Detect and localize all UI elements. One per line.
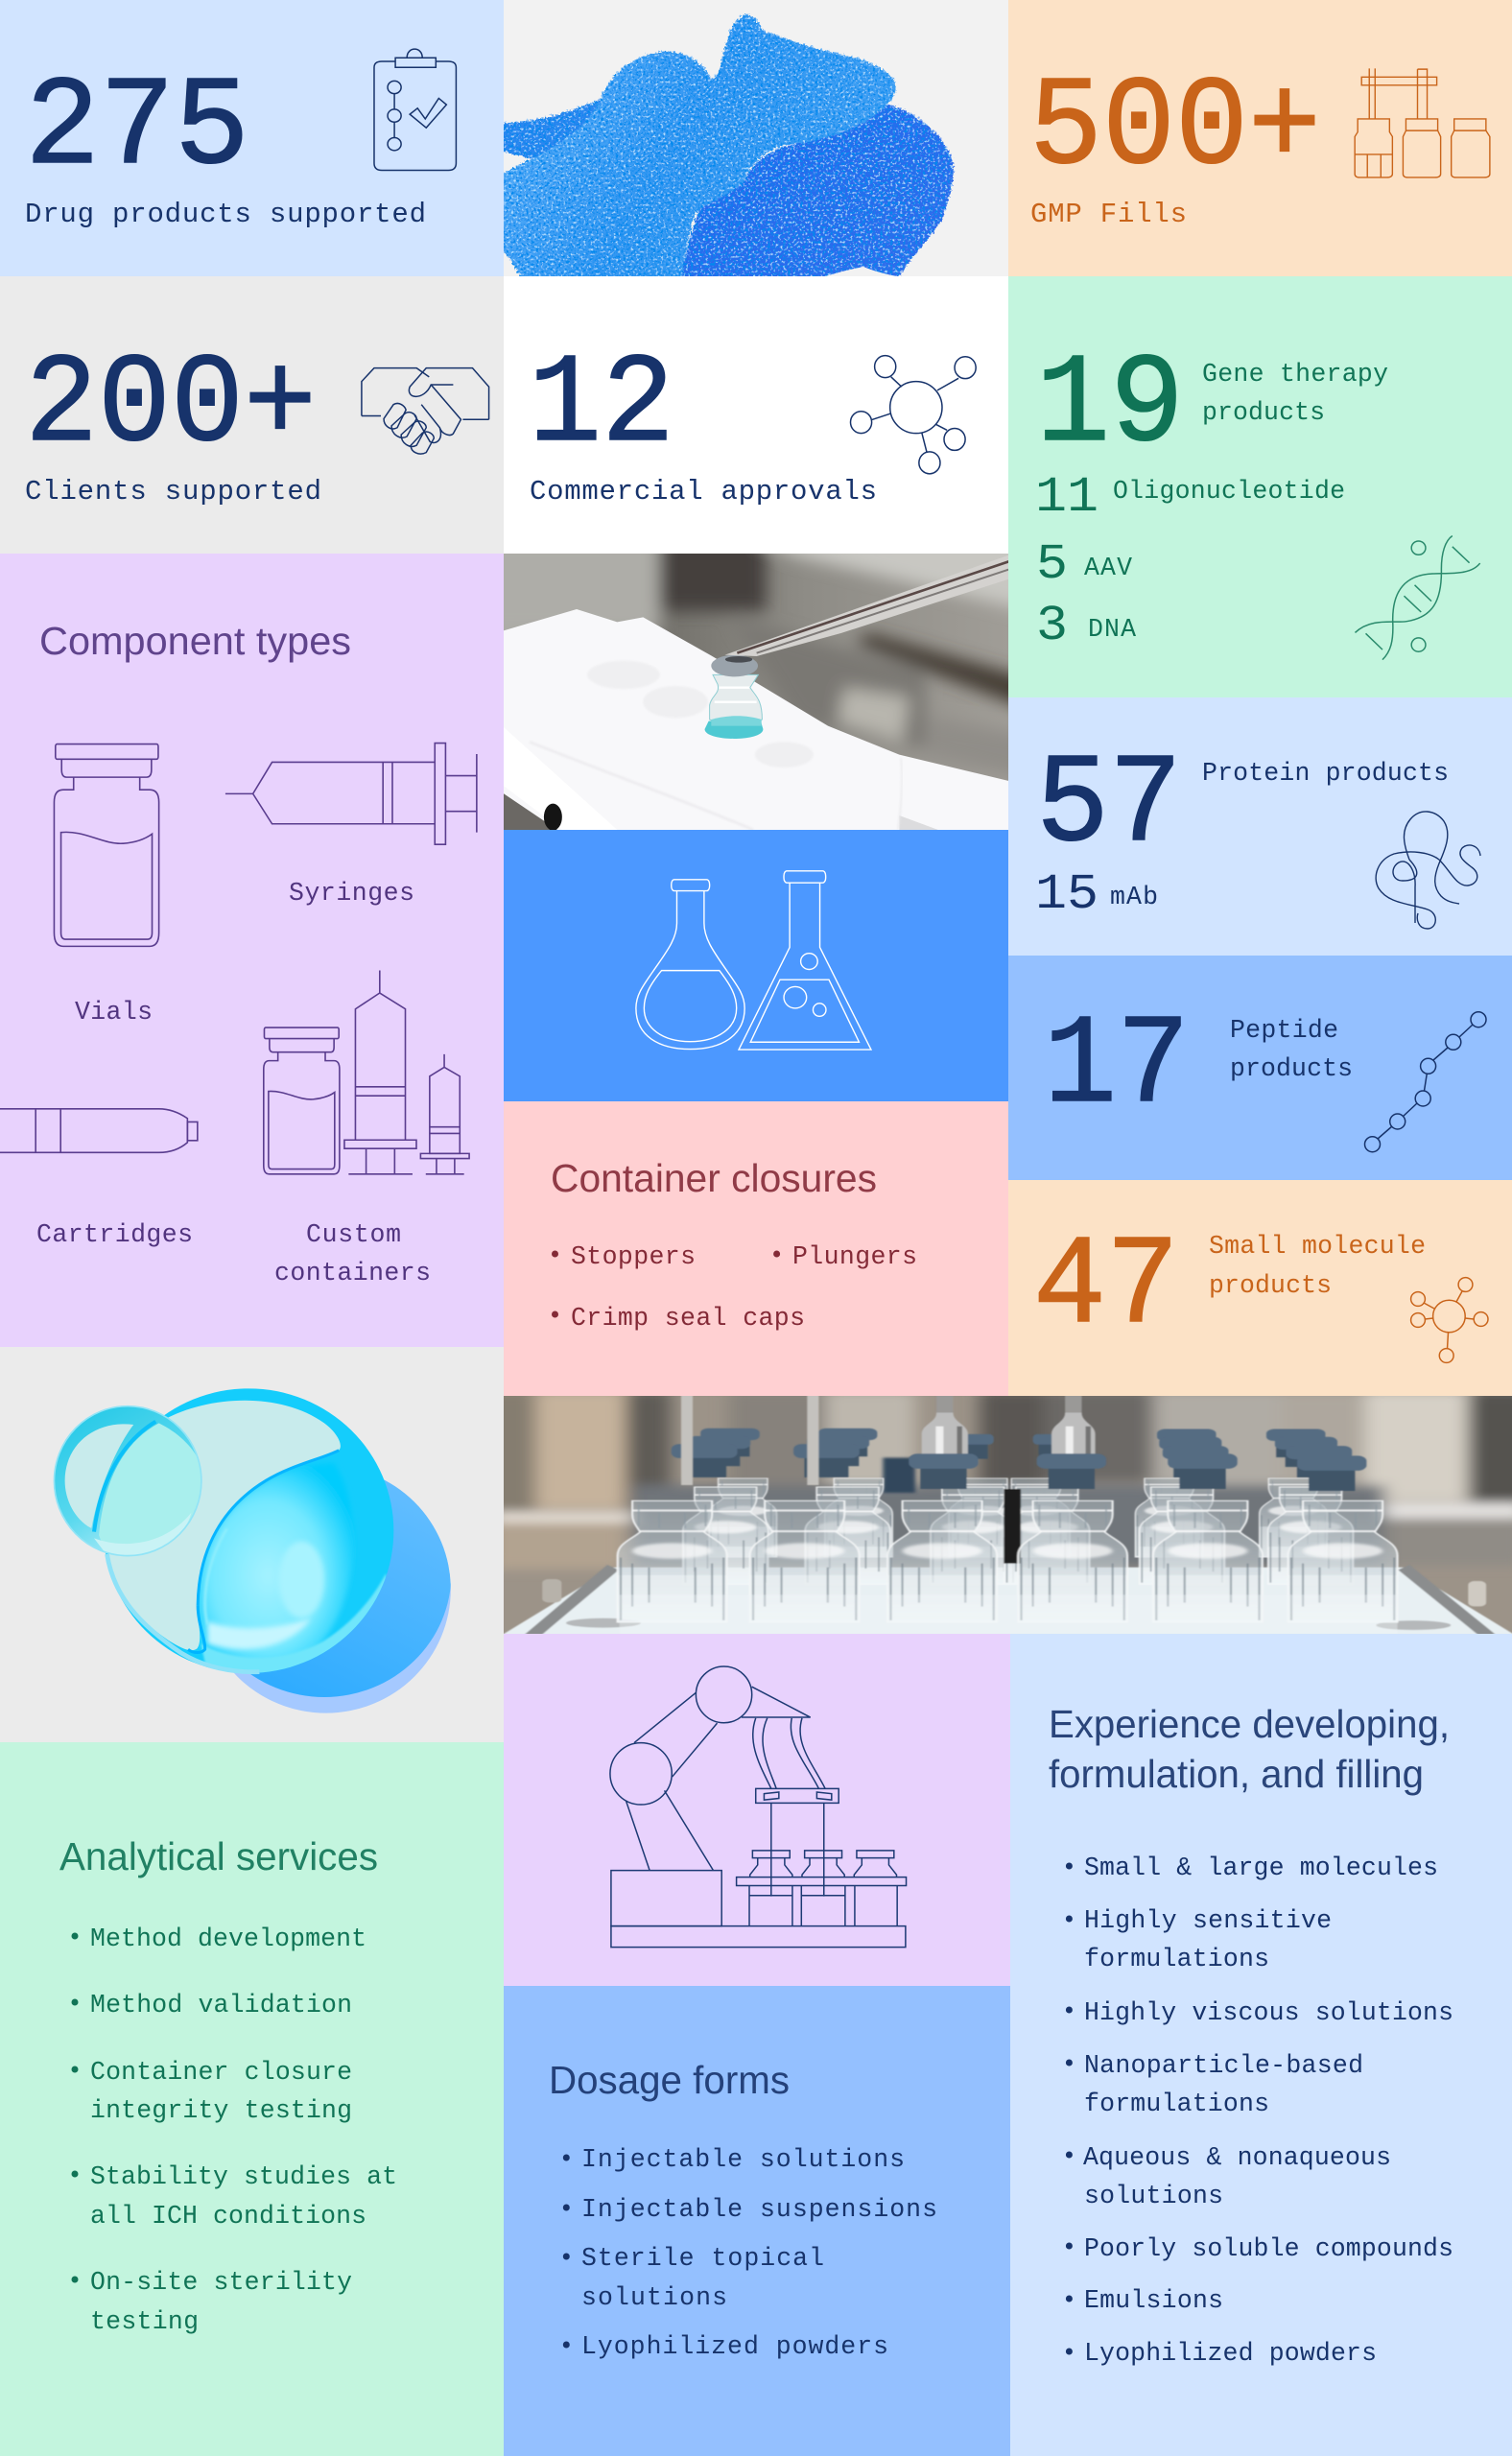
- stat number: 275: 275: [25, 57, 249, 201]
- list: analytical services: Stability studies at: [90, 2162, 397, 2191]
- list: closure types: Crimp seal caps: [571, 1304, 805, 1333]
- sub-stat: 11 oligonucleotide: [1035, 469, 1345, 526]
- list: experience: Highly viscous solutions: [1084, 1998, 1453, 2027]
- label: peptide products: Peptide: [1230, 1016, 1338, 1045]
- sub-stat: 5 AAV: [1036, 536, 1132, 593]
- panel: bubbles image: [0, 1347, 504, 1742]
- label: gene therapy products: Gene therapy: [1202, 360, 1388, 389]
- sub-stat: 15 mAb: [1035, 866, 1158, 923]
- heading: experience developing, formulation, and filling: Experience developing,: [1049, 1702, 1450, 1746]
- panel: component types: [0, 554, 504, 1347]
- sub-stat: 3 DNA: [1036, 598, 1136, 654]
- label: protein products: Protein products: [1202, 759, 1449, 788]
- panel: 12 commercial approvals: [504, 276, 1008, 554]
- stat number: 57: 57: [1036, 734, 1182, 878]
- label: small molecule products: products: [1209, 1271, 1332, 1300]
- label: small molecule products: Small molecule: [1209, 1232, 1426, 1261]
- panel: 275 drug products supported: [0, 0, 504, 276]
- list: analytical services: [71, 1925, 397, 2336]
- stat label: clients supported: Clients supported: [25, 476, 321, 508]
- sub-stat: 3 DNA: 3: [1036, 598, 1068, 654]
- sub-stat: 15 mAb: mAb: [1110, 883, 1158, 911]
- image: glass bubbles: [54, 1388, 451, 1713]
- liquid: [704, 721, 764, 739]
- icon: vial: [54, 744, 159, 946]
- panel: flasks illustration: [504, 830, 1008, 1101]
- icon: molecule network: [850, 356, 976, 474]
- label: small molecule products: [1209, 1232, 1426, 1300]
- stat label: GMP fills: GMP Fills: [1030, 199, 1187, 230]
- image: glass vials on filling line: [478, 1391, 1512, 1638]
- icon: cartridge: [0, 1109, 198, 1152]
- sub-stat: 5 AAV: 5: [1036, 536, 1068, 593]
- image: vial held by tweezers on white tray: [504, 554, 1008, 830]
- panel: container closures: [504, 1101, 1008, 1396]
- icon: handshake: [362, 368, 489, 454]
- list: experience: Emulsions: [1084, 2286, 1223, 2315]
- list: dosage forms: Lyophilized powders: [581, 2332, 888, 2361]
- list: experience: solutions: [1084, 2182, 1223, 2210]
- list: analytical services: Method validation: [90, 1991, 352, 2019]
- icon: protein scribble: [1376, 812, 1480, 929]
- list: experience: Aqueous & nonaqueous: [1083, 2143, 1391, 2172]
- sub-stat: 11 oligonucleotide: 11: [1035, 469, 1099, 526]
- heading: container closures: Container closures: [551, 1156, 877, 1200]
- label: gene therapy products: [1202, 360, 1388, 427]
- heading: experience developing, formulation, and filling: formulation, and filling: [1049, 1752, 1424, 1796]
- sub-stat: 3 DNA: DNA: [1088, 615, 1136, 644]
- image: blue particle blob: [497, 0, 1008, 285]
- stat number: 17: 17: [1044, 995, 1190, 1139]
- stat number: 200+: 200+: [25, 334, 317, 478]
- heading: dosage forms: Dosage forms: [549, 2058, 790, 2102]
- stat number: 500+: 500+: [1029, 57, 1321, 201]
- list: experience: Small & large molecules: [1084, 1854, 1438, 1882]
- panel: 200+ clients supported: [0, 276, 504, 554]
- list: analytical services: Container closure: [90, 2058, 352, 2087]
- list: experience: Highly sensitive: [1084, 1906, 1332, 1935]
- list: experience: Lyophilized powders: [1084, 2339, 1377, 2368]
- list: closure types: [552, 1242, 917, 1333]
- stat number: 19: 19: [1036, 334, 1184, 478]
- label: peptide products: products: [1230, 1054, 1353, 1083]
- sub-stat: 15 mAb: 15: [1035, 866, 1099, 923]
- heading: experience developing, formulation, and filling: [1049, 1702, 1450, 1796]
- icon: round flask and erlenmeyer flask: [636, 871, 871, 1050]
- heading: component types: Component types: [39, 619, 351, 663]
- stat label: drug products supported: Drug products supported: [25, 199, 426, 230]
- label: custom containers: Custom: [306, 1220, 401, 1249]
- stat number: 47: 47: [1033, 1216, 1179, 1359]
- list: analytical services: all ICH conditions: [90, 2202, 366, 2231]
- stat label: commercial approvals: Commercial approvals: [530, 476, 877, 508]
- panel: small molecule products: [1008, 1180, 1512, 1396]
- icon: clipboard checklist: [374, 49, 456, 171]
- icon: syringe: [225, 744, 477, 844]
- label: custom containers: [274, 1220, 431, 1287]
- list: analytical services: On-site sterility: [90, 2268, 352, 2297]
- icon: peptide chain: [1364, 1012, 1486, 1152]
- list: closure types: Plungers: [792, 1242, 917, 1271]
- panel: analytical services: [0, 1742, 504, 2456]
- list: analytical services: testing: [90, 2307, 199, 2336]
- label: gene therapy products: products: [1202, 398, 1325, 427]
- list: analytical services: integrity testing: [90, 2096, 352, 2125]
- list: dosage forms: Injectable solutions: [581, 2145, 905, 2174]
- list: dosage forms: Sterile topical: [581, 2244, 824, 2273]
- list: closure types: Stoppers: [571, 1242, 696, 1271]
- icon: filling station with vials: [1355, 68, 1490, 177]
- list: experience: Poorly soluble compounds: [1084, 2234, 1453, 2263]
- panel: 500+ GMP fills: [1008, 0, 1512, 276]
- label: custom containers: containers: [274, 1259, 431, 1287]
- label: vials: Vials: [75, 998, 153, 1027]
- label: cartridges: Cartridges: [36, 1220, 193, 1249]
- label: syringes: Syringes: [289, 879, 414, 908]
- panel: protein products: [1008, 697, 1512, 956]
- heading: analytical services: Analytical services: [59, 1834, 378, 1878]
- icon: small molecule: [1411, 1278, 1488, 1362]
- list: experience: formulations: [1084, 2090, 1269, 2118]
- list: dosage forms: [563, 2145, 937, 2361]
- panel: dosage forms: [504, 1986, 1010, 2456]
- back rows of capped vials: [672, 1429, 1352, 1477]
- label: peptide products: [1230, 1016, 1353, 1083]
- panel: gene therapy products: [1008, 276, 1512, 697]
- sub-stat: 11 oligonucleotide: Oligonucleotide: [1113, 477, 1345, 506]
- list: experience: formulations: [1084, 1945, 1269, 1973]
- list: analytical services: Method development: [90, 1925, 366, 1953]
- sub-stat: 5 AAV: AAV: [1084, 554, 1132, 582]
- stat number: 12: 12: [529, 334, 674, 478]
- panel: robot arm illustration: [504, 1634, 1010, 1986]
- panel: peptide products: [1008, 956, 1512, 1180]
- list: experience: [1066, 1854, 1453, 2368]
- list: experience: Nanoparticle-based: [1084, 2051, 1363, 2080]
- icon: DNA helix: [1355, 535, 1480, 660]
- panel: experience developing, formulation, and filling: [1010, 1634, 1512, 2456]
- list: dosage forms: Injectable suspensions: [581, 2195, 937, 2224]
- icon: custom containers: [264, 970, 469, 1174]
- list: dosage forms: solutions: [581, 2283, 727, 2312]
- icon: robotic filling arm: [610, 1666, 907, 1948]
